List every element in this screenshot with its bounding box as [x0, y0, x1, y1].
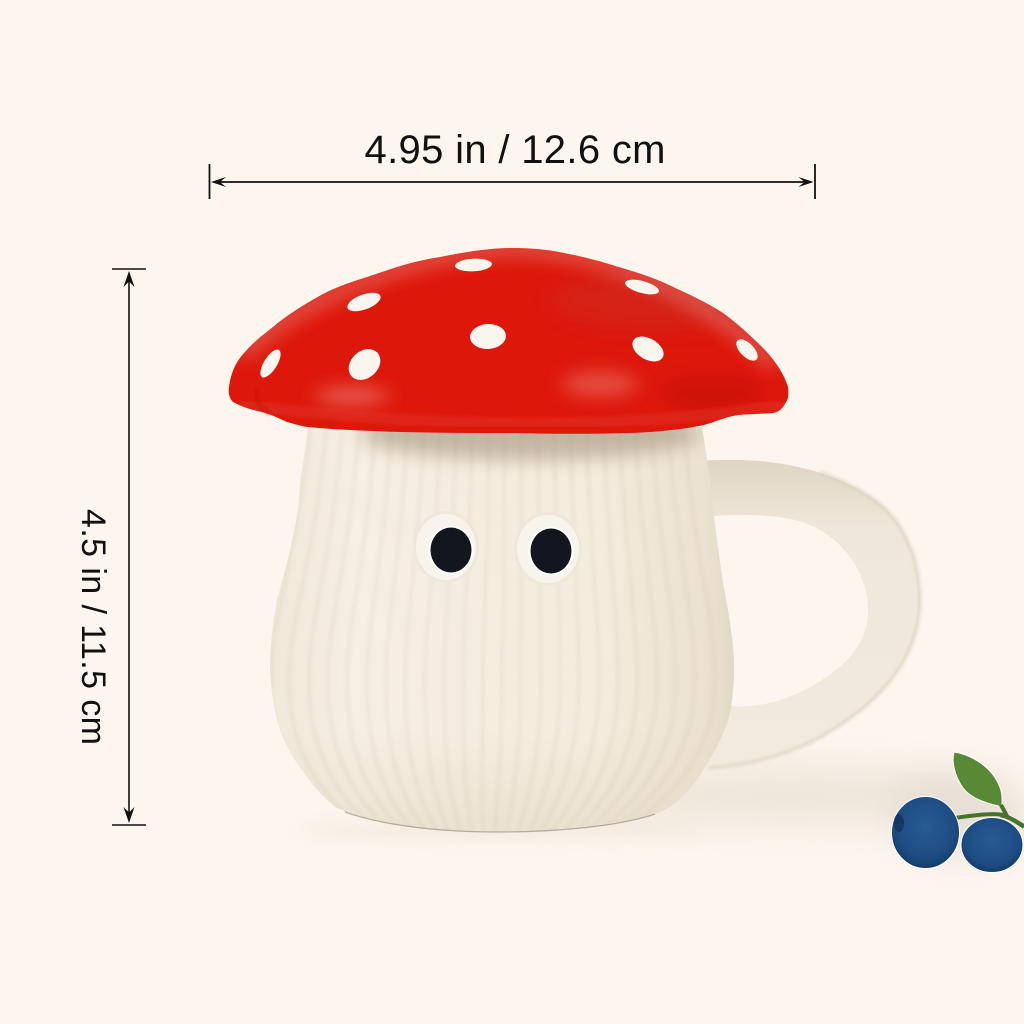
ground shadow	[295, 765, 1024, 855]
lower body shade	[321, 786, 666, 832]
cap shadow on body	[354, 427, 704, 470]
stem over right berry	[1000, 815, 1024, 827]
blueberries with leaf	[892, 752, 1024, 872]
height arrow	[112, 269, 146, 825]
leaf	[953, 752, 1002, 807]
eye: right	[514, 512, 582, 586]
mushroom cap lid	[229, 248, 788, 434]
height dimension	[74, 269, 146, 825]
width arrow	[210, 164, 815, 199]
body ribs	[276, 427, 704, 832]
infographic canvas	[82, 134, 1024, 873]
berry calyx	[894, 814, 904, 832]
width dimension	[210, 128, 815, 199]
eye: left	[413, 511, 479, 583]
mug handle	[700, 460, 920, 768]
width label: 4.95 in / 12.6 cm	[364, 128, 666, 172]
stems	[955, 805, 1024, 826]
base contact line	[345, 812, 655, 832]
mug body	[260, 408, 750, 835]
cap shading	[240, 248, 786, 424]
cap spots	[257, 258, 761, 386]
cap fold	[256, 388, 270, 414]
berry right	[961, 818, 1023, 872]
height label: 4.5 in / 11.5 cm	[74, 509, 112, 745]
berry left	[892, 796, 960, 868]
